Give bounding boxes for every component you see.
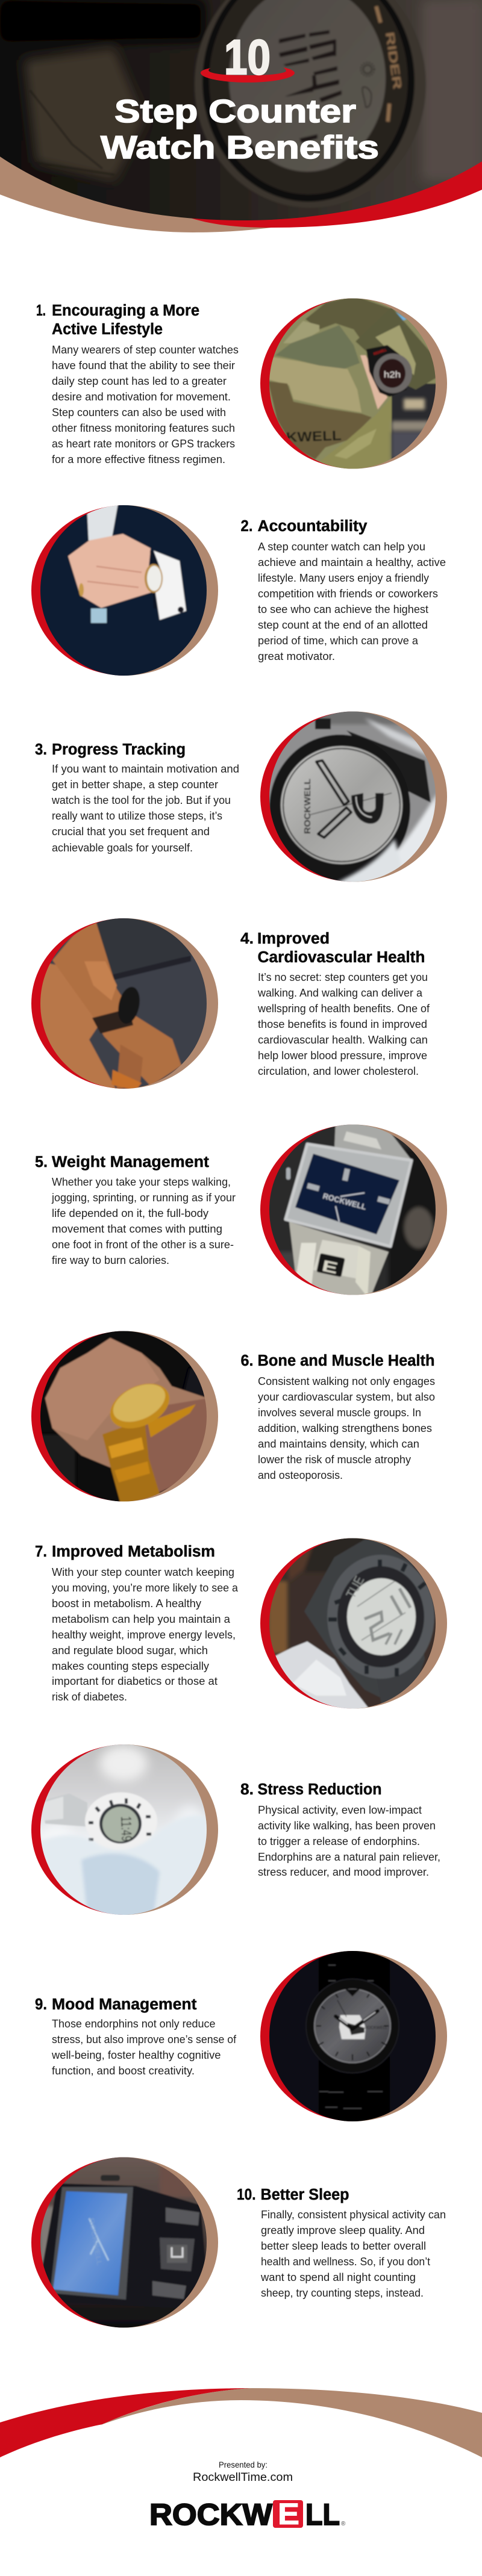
presented by: RockwellTime.com — [193, 2471, 293, 2484]
benefit 4 photo: forearm with black watch — [31, 916, 218, 1091]
benefit 2 photo: hand and cuff on navy suit — [31, 503, 218, 678]
heading 7: 7. — [35, 1543, 47, 1560]
heading 6: 6. — [241, 1352, 253, 1369]
heading 5: Weight Management — [52, 1154, 210, 1171]
heading 10: Better Sleep — [260, 2186, 349, 2203]
presented by — [193, 2460, 293, 2484]
body 9 — [51, 2018, 237, 2077]
benefit 1 photo: camo jacket and watch: h2h — [384, 370, 401, 380]
body 3: achievable goals for yourself. — [52, 842, 193, 854]
body 1: as heart rate monitors or GPS trackers — [52, 438, 235, 450]
benefit 9 photo: black watch — [260, 1949, 447, 2123]
body 1: daily step count has led to a greater — [52, 375, 227, 387]
heading 2: Accountability — [258, 518, 368, 535]
heading 3: 3. — [35, 741, 47, 758]
benefit 2 text — [241, 518, 446, 662]
benefit 10 text — [237, 2186, 446, 2299]
benefit 3 photo: silver dial in snow: ROCKWELL — [302, 779, 313, 834]
body 1: other fitness monitoring features such — [52, 422, 235, 434]
title: Watch Benefits — [101, 129, 379, 166]
body 7: risk of diabetes. — [52, 1691, 127, 1703]
benefit 7 photo: grey digital watch in snow: TUE — [343, 1573, 367, 1601]
title: Step Counter — [114, 93, 356, 129]
body 7: With your step counter watch keeping — [52, 1566, 234, 1578]
body 5: one foot in front of the other is a sure- — [52, 1239, 234, 1251]
heading 4: Cardiovascular Health — [258, 949, 425, 966]
body 4: those benefits is found in improved — [258, 1018, 427, 1030]
Rockwell logo — [149, 2497, 346, 2531]
body 1: Step counters can also be used with — [52, 406, 226, 418]
heading 9: Mood Management — [52, 1996, 197, 2013]
body 10 — [260, 2209, 446, 2299]
body 10: want to spend all night counting — [260, 2271, 416, 2283]
header photo: watch close-up: RIDER — [383, 31, 404, 91]
body 2: A step counter watch can help you — [258, 541, 425, 553]
heading 10: 10. — [237, 2186, 255, 2203]
heading 1: Active Lifestyle — [52, 321, 163, 338]
body 10: Finally, consistent physical activity can — [261, 2209, 446, 2221]
heading 5: 5. — [35, 1154, 48, 1171]
body 6: addition, walking strengthens bones — [258, 1422, 432, 1434]
body 3: crucial that you set frequent and — [52, 826, 210, 838]
body 7: and regulate blood sugar, which — [52, 1644, 208, 1657]
benefit 8 photo: white watch in snow: 11:49 — [117, 1816, 134, 1842]
body 2: step count at the end of an allotted — [258, 619, 428, 631]
body 4: walking. And walking can deliver a — [257, 987, 423, 999]
body 6: and osteoporosis. — [258, 1469, 343, 1481]
body 7: important for diabetics or those at — [52, 1675, 218, 1687]
benefit 8 photo: white watch in snow — [31, 1743, 218, 1917]
body 8: activity like walking, has been proven — [258, 1820, 436, 1832]
benefit 1 text — [36, 302, 239, 465]
body 5: jogging, sprinting, or running as if your — [51, 1192, 236, 1204]
body 3: If you want to maintain motivation and — [52, 763, 239, 775]
body 8: Physical activity, even low-impact — [258, 1804, 422, 1816]
Rockwell logo: E — [278, 2497, 299, 2531]
header photo: watch close-up — [0, 0, 482, 229]
body 6: your cardiovascular system, but also — [258, 1391, 435, 1403]
benefit 1 photo: camo jacket and watch: ROCKWELL — [374, 349, 387, 356]
body 2: achieve and maintain a healthy, active — [258, 556, 446, 568]
benefit 4 text — [240, 930, 430, 1077]
header swoosh: tan — [0, 151, 313, 232]
benefit 1 photo: camo jacket and watch: KWELL — [286, 428, 342, 445]
heading 4: 4. — [240, 930, 254, 947]
body 7: boost in metabolism. A healthy — [52, 1598, 201, 1610]
benefit 7 photo: grey digital watch in snow — [260, 1536, 447, 1711]
heading 6: Bone and Muscle Health — [258, 1352, 435, 1369]
heading 3: Progress Tracking — [52, 741, 186, 758]
benefit 7 text — [35, 1543, 239, 1703]
footer swoosh — [0, 2388, 482, 2457]
body 1: for a more effective fitness regimen. — [52, 453, 225, 465]
heading 8: 8. — [240, 1781, 254, 1798]
heading 1: Encouraging a More — [52, 302, 199, 319]
benefit 10 photo: blue-faced square watch — [31, 2155, 218, 2330]
body 6: Consistent walking not only engages — [258, 1375, 435, 1387]
body 10: sheep, try counting steps, instead. — [261, 2287, 424, 2299]
body 1: have found that the ability to see their — [52, 359, 235, 372]
body 6: and maintains density, which can — [258, 1438, 419, 1450]
body 2: to see who can achieve the highest — [258, 603, 428, 615]
body 3: watch is the tool for the job. But if you — [51, 794, 231, 806]
title number: 10 — [224, 30, 271, 85]
benefit 5 photo: silver square watch: ROCKWELL — [322, 1191, 368, 1212]
heading 2: 2. — [241, 518, 253, 535]
body 7: healthy weight, improve energy levels, — [52, 1629, 236, 1641]
body 5: fire way to burn calories. — [52, 1254, 169, 1266]
body 8: to trigger a release of endorphins. — [258, 1835, 420, 1847]
body 4: circulation, and lower cholesterol. — [258, 1065, 419, 1077]
heading 8: Stress Reduction — [258, 1781, 382, 1798]
body 7 — [52, 1566, 239, 1703]
heading 4 — [240, 930, 425, 966]
body 9: stress, but also improve one’s sense of — [52, 2033, 237, 2046]
heading 1: 1. — [36, 302, 46, 319]
body 5: Whether you take your steps walking, — [52, 1176, 231, 1188]
body 5: life depended on it, the full-body — [52, 1207, 208, 1219]
body 9: well-being, foster healthy cognitive — [51, 2049, 221, 2061]
body 8: Endorphins are a natural pain reliever, — [258, 1851, 440, 1863]
body 4: It’s no secret: step counters get you — [258, 971, 428, 983]
body 5: movement that comes with putting — [52, 1223, 222, 1235]
body 8: stress reducer, and mood improver. — [258, 1866, 429, 1878]
body 6: lower the risk of muscle atrophy — [258, 1454, 411, 1466]
benefit 5 photo: silver square watch — [260, 1122, 447, 1297]
benefit 3 photo: silver dial in snow — [260, 709, 447, 884]
title — [101, 93, 379, 166]
benefit 5 photo: silver square watch: E — [321, 1257, 339, 1277]
body 7: metabolism can help you maintain a — [52, 1613, 231, 1625]
body 3: really want to utilize those steps, it’s — [52, 810, 222, 822]
body 5 — [51, 1176, 236, 1266]
body 6 — [258, 1375, 435, 1481]
body 1: desire and motivation for movement. — [52, 391, 231, 403]
heading 1 — [36, 302, 199, 338]
presented by: Presented by: — [219, 2460, 268, 2469]
body 4: wellspring of health benefits. One of — [257, 1003, 430, 1015]
benefit 1 photo: camo jacket and watch — [260, 296, 447, 471]
body 4 — [257, 971, 430, 1077]
body 1 — [52, 344, 239, 465]
body 4: cardiovascular health. Walking can — [258, 1034, 428, 1046]
benefit 8 text — [240, 1781, 440, 1878]
benefit 5 text — [35, 1154, 236, 1266]
benefit 10 photo: blue-faced square watch: ROCKWELL — [87, 2217, 103, 2266]
benefit 9 photo: black watch: ROCKWELL — [365, 2026, 387, 2030]
body 9: function, and boost creativity. — [52, 2065, 195, 2077]
body 2: lifestyle. Many users enjoy a friendly — [258, 572, 429, 584]
heading 9: 9. — [35, 1996, 47, 2013]
body 10: health and wellness. So, if you don’t — [261, 2256, 430, 2268]
body 3 — [51, 763, 239, 854]
body 10: better sleep leads to better overall — [261, 2240, 426, 2252]
header banner — [0, 0, 482, 232]
Rockwell logo: LL — [305, 2498, 340, 2531]
body 2: competition with friends or coworkers — [258, 588, 438, 600]
body 8 — [258, 1804, 440, 1878]
benefit 3 text — [35, 741, 239, 854]
body 7: makes counting steps especially — [52, 1660, 209, 1672]
body 9: Those endorphins not only reduce — [52, 2018, 216, 2030]
body 6: involves several muscle groups. In — [258, 1407, 421, 1419]
body 10: greatly improve sleep quality. And — [261, 2224, 425, 2236]
body 3: get in better shape, a step counter — [52, 779, 218, 791]
body 2: great motivator. — [258, 650, 335, 662]
body 7: you moving, you’re more likely to see a — [52, 1582, 239, 1594]
Rockwell logo: ROCKW — [149, 2498, 273, 2531]
body 2 — [258, 541, 446, 662]
body 4: help lower blood pressure, improve — [258, 1050, 427, 1062]
Rockwell logo: ® — [341, 2521, 346, 2527]
benefit 9 text — [35, 1996, 237, 2077]
benefit 6 photo: fist with gold watch — [31, 1329, 218, 1504]
benefit 6 text — [241, 1352, 435, 1481]
header swoosh: red — [190, 158, 482, 228]
ring under the number — [201, 67, 295, 82]
heading 7: Improved Metabolism — [52, 1543, 215, 1560]
heading 4: Improved — [257, 930, 330, 947]
body 2: period of time, which can prove a — [258, 635, 419, 647]
body 1: Many wearers of step counter watches — [52, 344, 239, 356]
